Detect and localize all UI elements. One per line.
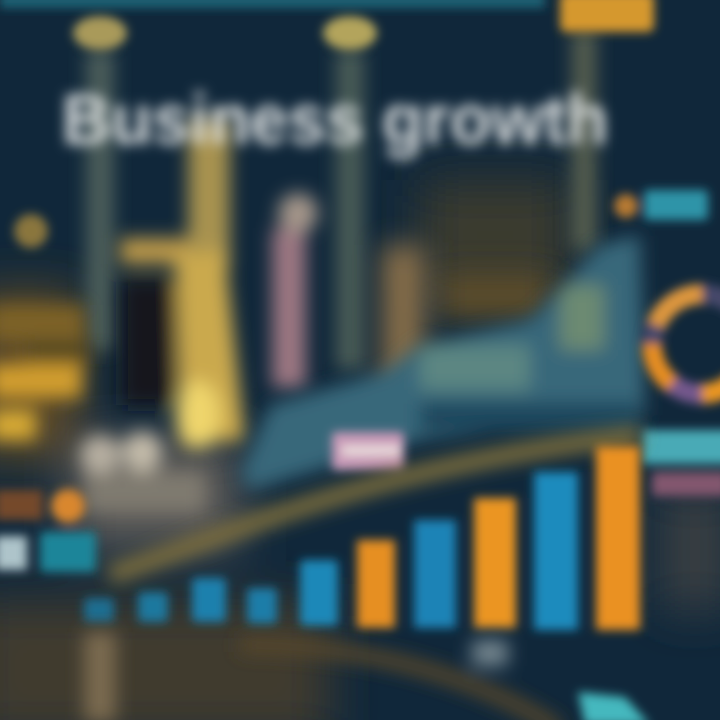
- rising teal city blocks: [240, 235, 645, 490]
- golden statue figure: [120, 120, 245, 449]
- donut chart: [652, 294, 720, 394]
- upper-right teal tag: [614, 190, 708, 220]
- white pale blocks: [80, 432, 205, 512]
- bar chart: [84, 446, 640, 630]
- bottom teal tag: [578, 692, 650, 720]
- lower reflections: [84, 632, 560, 720]
- left golden structure: [0, 305, 90, 440]
- warm lower-left haze: [0, 180, 720, 720]
- top teal band: [0, 0, 545, 8]
- orange and teal left tags: [0, 489, 96, 572]
- pink label: [332, 432, 404, 470]
- tan column: [382, 245, 550, 395]
- title: Business growth: [62, 81, 608, 160]
- right legend tags: [642, 430, 720, 496]
- arc line: [110, 435, 640, 575]
- lamp posts: [86, 30, 596, 370]
- lamp tops: [14, 0, 654, 248]
- pink column: [272, 193, 318, 388]
